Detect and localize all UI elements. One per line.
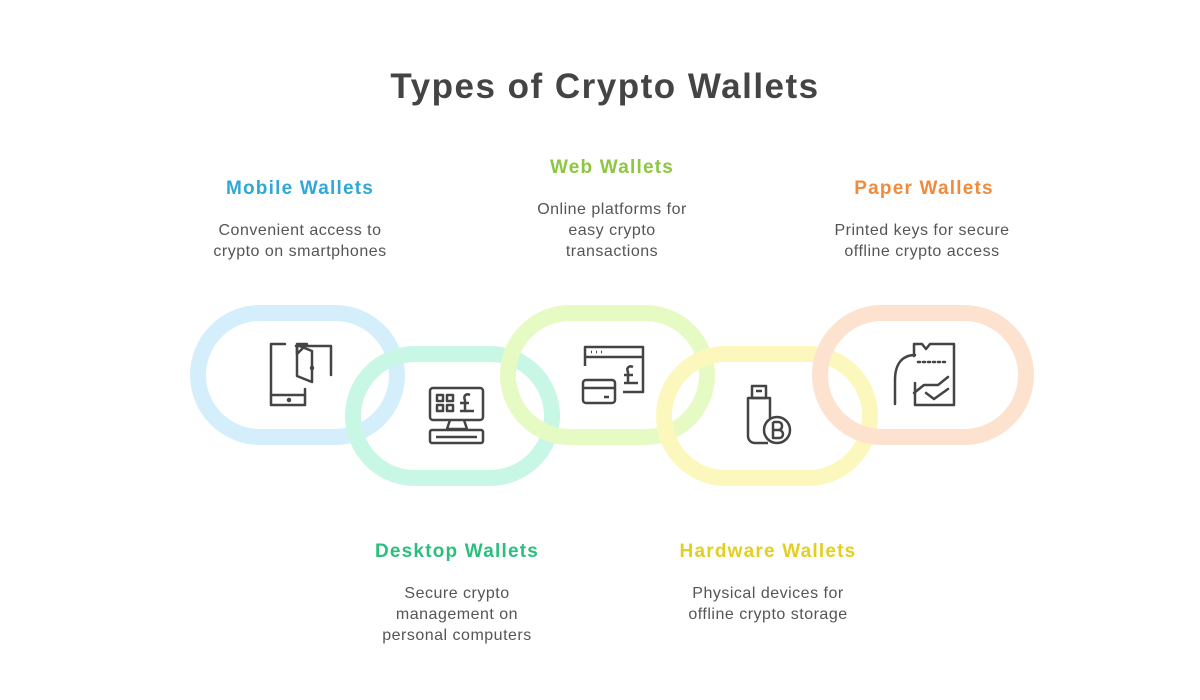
heading: web: Web Wallets	[550, 157, 674, 178]
text: mobile: crypto on smartphones	[213, 243, 387, 260]
text: hardware: Physical devices for	[692, 585, 844, 602]
icon: paper	[895, 344, 954, 405]
text: hardware: offline crypto storage	[688, 606, 848, 623]
text: web: Online platforms for	[537, 201, 687, 218]
link: web	[508, 313, 707, 437]
heading: paper: Paper Wallets	[854, 178, 994, 199]
text: web	[537, 201, 687, 260]
link: desktop	[353, 354, 552, 478]
text: desktop: Secure crypto	[404, 585, 510, 602]
heading: mobile: Mobile Wallets	[226, 178, 374, 199]
text: paper	[834, 222, 1010, 260]
icon: hardware	[748, 386, 790, 443]
heading: desktop: Desktop Wallets	[375, 541, 539, 562]
icon: web	[583, 347, 643, 403]
text: desktop: personal computers	[382, 627, 532, 644]
text: mobile	[213, 222, 387, 260]
text: paper: Printed keys for secure	[834, 222, 1010, 239]
text: paper: offline crypto access	[844, 243, 1000, 260]
link: paper	[820, 313, 1026, 437]
text: desktop	[382, 585, 532, 644]
text: desktop: management on	[396, 606, 518, 623]
text: web: transactions	[566, 243, 658, 260]
icon: mobile	[271, 344, 331, 405]
text: mobile: Convenient access to	[218, 222, 381, 239]
text: hardware	[688, 585, 848, 623]
icon: desktop	[430, 388, 483, 443]
heading: hardware: Hardware Wallets	[680, 541, 856, 562]
link: hardware	[664, 354, 870, 478]
title: Types of Crypto Wallets	[390, 67, 820, 106]
link: mobile	[198, 313, 397, 437]
text: web: easy crypto	[568, 222, 656, 239]
